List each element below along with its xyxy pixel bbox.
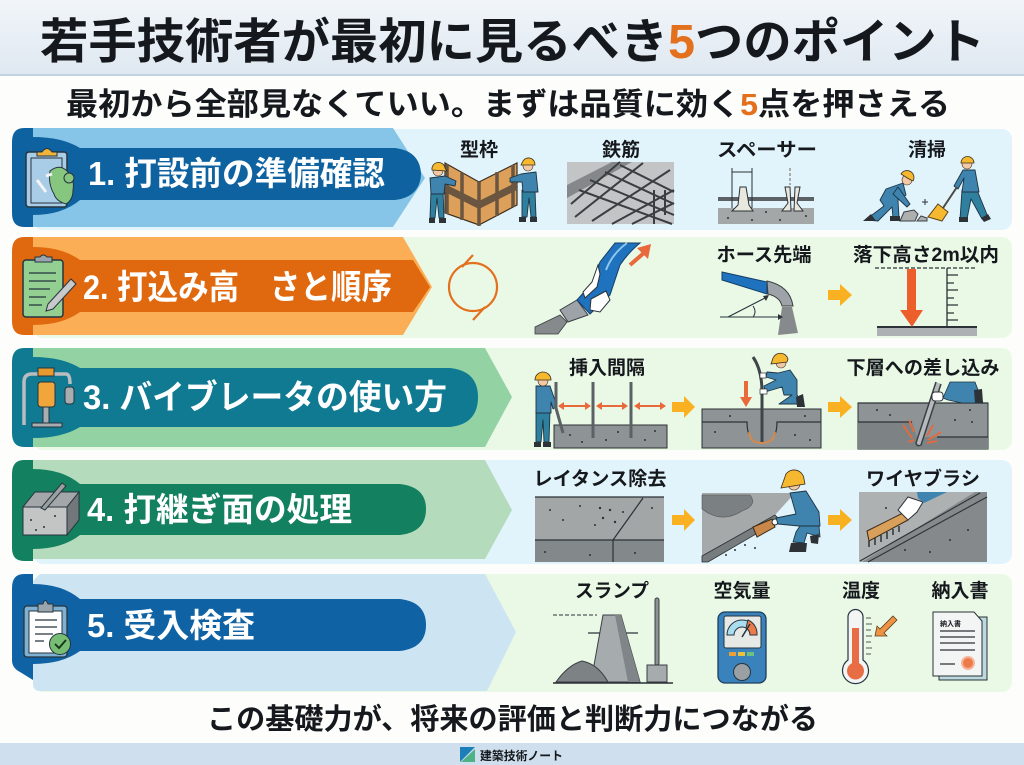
icon: concrete block and brush (23, 483, 79, 535)
panel: 4 construction joint treatment (12, 460, 1012, 564)
title: 若手技術者が最初に見るべき5つのポイント (40, 16, 985, 69)
icon: inspection clipboard (24, 600, 70, 657)
subtitle: 最初から全部見なくていい。まずは品質に効く 5点を押さえる (66, 87, 950, 122)
header chevron (33, 128, 425, 227)
illustration: formwork and workers (429, 158, 538, 226)
illustration: wire brush (859, 492, 987, 562)
arrow (672, 509, 695, 531)
panel background (33, 348, 1012, 450)
label: cleaning: 清掃 (908, 138, 946, 161)
illustration: delivery slip document (933, 612, 987, 680)
illustration: insertion interval (534, 372, 667, 448)
icon: clipboard with map (26, 148, 74, 207)
arrow (828, 509, 852, 531)
label: laitance removal: レイタンス除去 (534, 468, 666, 490)
label: formwork: 型枠 (460, 139, 498, 161)
header tab (12, 237, 430, 335)
illustration: slump test (553, 598, 673, 683)
illustration: thermometer (842, 610, 897, 684)
label: hose tip: ホース先端 (716, 244, 812, 266)
label: temperature: 温度 (842, 580, 880, 602)
page header band (0, 0, 1024, 76)
icon: circular order arrow (449, 255, 497, 320)
header tab (12, 128, 421, 227)
heading: 4. 打継ぎ面の処理 (87, 491, 352, 528)
panel background (33, 460, 1012, 564)
heading: 5. 受入検査 (87, 607, 255, 644)
arrow (828, 396, 852, 418)
heading: 3. バイブレータの使い方 (83, 378, 447, 417)
illustration: insert to lower layer (858, 382, 988, 449)
label: spacer: スペーサー (717, 140, 817, 161)
header tab (12, 460, 426, 561)
icon: logo (460, 747, 475, 762)
header tab (12, 348, 478, 447)
header tab (12, 574, 426, 680)
illustration: delivery slip document: 納入書 (940, 619, 961, 628)
illustration: spacer diagram (718, 168, 814, 224)
label: slump: スランプ (575, 580, 649, 602)
heading: 2. 打込み高 さと順序 (83, 269, 392, 307)
illustration: drop height diagram (875, 268, 977, 336)
panel background (33, 574, 1012, 692)
label: rebar: 鉄筋 (602, 139, 640, 161)
footer brand text: 建築技術ノート (480, 748, 563, 763)
icon: checklist and pencil (23, 255, 76, 317)
footer bar (0, 743, 1024, 765)
panel: 5 acceptance inspection (12, 574, 1012, 692)
arrow (828, 284, 852, 306)
illustration: laitance surface (535, 497, 664, 562)
panel: 1 preparation check (12, 128, 1012, 230)
illustration: hose tip (720, 272, 798, 335)
label: wire brush: ワイヤブラシ (866, 467, 980, 490)
illustration: rebar mesh (567, 162, 674, 224)
header chevron (33, 574, 516, 691)
label: insertion interval: 挿入間隔 (569, 357, 645, 379)
illustration: worker brushing (702, 470, 820, 562)
illustration: vibrator insertion (702, 353, 821, 448)
label: insert to lower layer: 下層への差し込み (846, 357, 1000, 379)
label: drop height: 落下高さ2m以内 (853, 244, 999, 266)
label: air content: 空気量 (713, 580, 771, 602)
illustration: hose in hand (535, 243, 651, 334)
panel background (33, 129, 1012, 230)
illustration: air meter (718, 612, 766, 683)
icon: vibrator (24, 368, 74, 427)
closing statement: この基礎力が、将来の評価と判断力につながる (207, 702, 818, 736)
header chevron (33, 348, 512, 447)
arrow (672, 396, 695, 418)
header chevron (33, 237, 432, 335)
panel: 2 pouring height and order (12, 237, 1012, 338)
header chevron (33, 460, 512, 559)
illustration: cleaning workers (863, 156, 991, 222)
label: delivery slip: 納入書 (931, 579, 989, 602)
heading: 1. 打設前の準備確認 (88, 155, 385, 192)
panel: 3 vibrator usage (12, 348, 1012, 450)
panel background (33, 237, 1012, 338)
